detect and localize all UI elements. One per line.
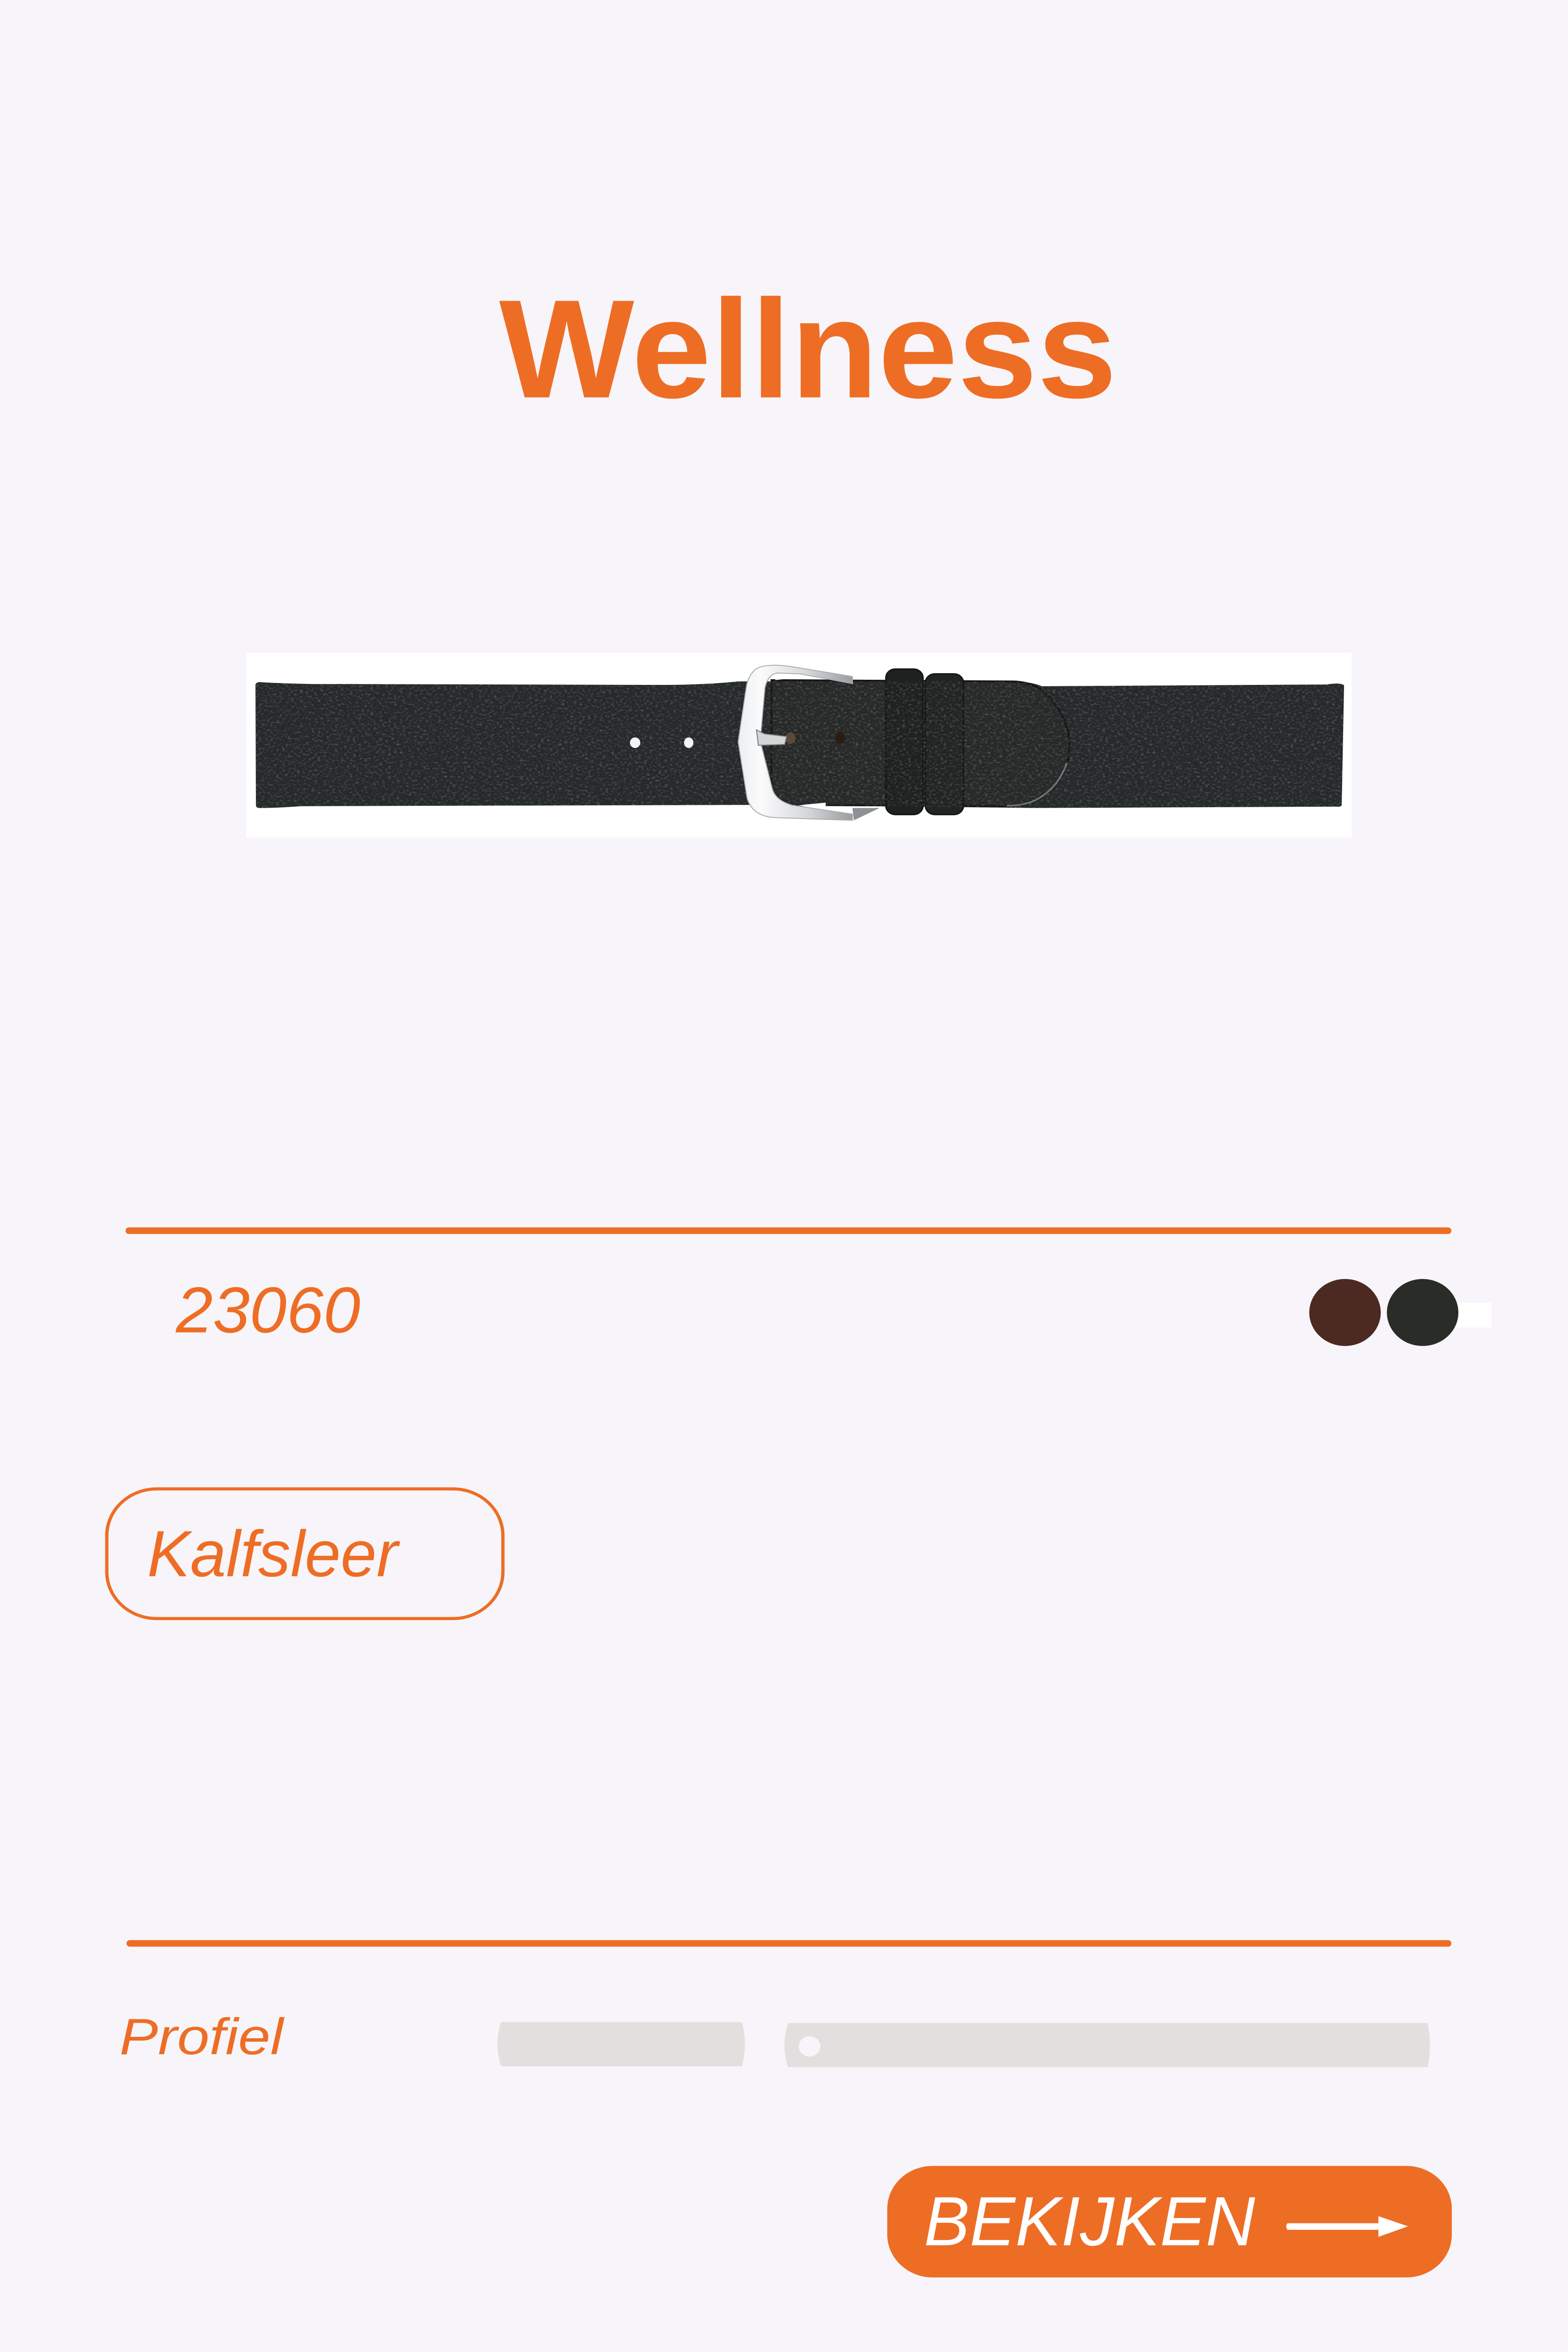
buckle keeper bbox=[852, 808, 880, 820]
profile bar long bbox=[785, 2023, 1430, 2067]
divider bottom bbox=[127, 1940, 1451, 1947]
leather grain bbox=[255, 681, 1344, 808]
button body bbox=[887, 2166, 1452, 2278]
profile label: Profiel bbox=[119, 2008, 285, 2065]
strap tip overlap bbox=[772, 680, 1069, 806]
brown swatch bbox=[1309, 1279, 1381, 1346]
product card bbox=[105, 295, 1491, 2278]
title: Wellness bbox=[499, 271, 1117, 428]
strap body bbox=[255, 682, 1344, 808]
strap holes bbox=[630, 731, 845, 748]
buckle pin bbox=[756, 730, 787, 745]
article number: 23060 bbox=[175, 1274, 360, 1346]
profile bar short bbox=[498, 2022, 745, 2066]
profile dot bbox=[799, 2036, 820, 2057]
button label: BEKIJKEN bbox=[924, 2183, 1255, 2260]
tag label: Kalfsleer bbox=[147, 1518, 400, 1590]
material tag bbox=[107, 1489, 503, 1619]
white swatch remnant bbox=[1440, 1303, 1491, 1327]
black swatch bbox=[1387, 1279, 1458, 1346]
loop 2 bbox=[925, 674, 963, 815]
view button bbox=[887, 2166, 1452, 2278]
white gaps inside buckle bbox=[775, 673, 795, 680]
profile diagram bbox=[498, 2022, 1430, 2067]
tag outline bbox=[107, 1489, 503, 1619]
strap tip edge highlight bbox=[1007, 763, 1067, 806]
arrow bbox=[1286, 2216, 1408, 2237]
photo white backdrop bbox=[246, 653, 1352, 837]
buckle frame bbox=[738, 665, 852, 820]
product photo: leather watch strap bbox=[246, 653, 1352, 837]
divider top bbox=[126, 1227, 1451, 1234]
loop 1 bbox=[886, 669, 923, 815]
colour swatches bbox=[1309, 1279, 1491, 1346]
